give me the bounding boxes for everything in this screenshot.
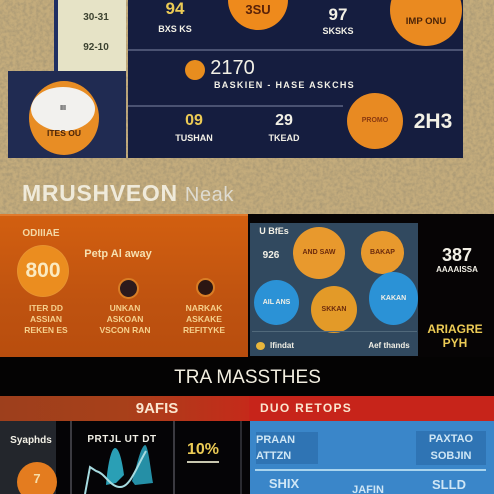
circle: blue one: AIL ANS <box>263 299 290 306</box>
legend left <box>256 341 294 350</box>
yellow callout: PYH <box>443 336 467 350</box>
white circle face: III <box>60 105 66 112</box>
stat 29 caption: TKEAD <box>268 133 300 143</box>
circle: blue two <box>369 272 418 325</box>
band: black title band <box>0 357 494 396</box>
stat 97 caption: SKSKS <box>322 26 354 36</box>
orange text column one: ASSIAN <box>30 314 62 324</box>
panel: blue-grey circles <box>250 223 418 356</box>
stat 387: 387 <box>442 245 472 265</box>
panel: black right <box>248 214 494 357</box>
orange text column three: ASKAKE <box>186 314 222 324</box>
yellow callout <box>427 322 483 350</box>
circle: right orange <box>390 0 462 46</box>
stat 29 <box>268 112 300 143</box>
circle: orange one: AND SAW <box>302 249 336 256</box>
circle: orange two: BAKAP <box>370 249 395 256</box>
icon: orange circle <box>17 462 57 494</box>
blue bottom right: SLLD <box>432 477 466 492</box>
circle: orange two <box>361 231 404 274</box>
stat 2170: 2170 <box>210 57 255 79</box>
stat 97 <box>322 5 354 36</box>
blue block top left: PRAAN <box>256 434 295 446</box>
orange text column three <box>183 303 225 335</box>
yellow callout: ARIAGRE <box>427 322 483 336</box>
circle: lower orange <box>347 93 403 149</box>
stat 29: 29 <box>275 112 293 129</box>
orange text column three: REFITYKE <box>183 325 225 335</box>
panel: black lower left <box>0 421 250 494</box>
legend left label: Ifindat <box>270 341 294 350</box>
stat 2H3: 2H3 <box>414 110 452 133</box>
circle caption: ITES OU <box>47 128 81 138</box>
icon: small orange dot <box>185 60 205 80</box>
left band label: 9AFIS <box>136 400 178 417</box>
heading: MRUSHVEON Neak <box>22 180 234 206</box>
panel: beige notes <box>54 0 126 71</box>
circle: lower orange: PROMO <box>362 117 388 124</box>
chart label: PRTJL UT DT <box>87 434 157 445</box>
circle: blue two: KAKAN <box>381 295 406 302</box>
orange text column two: UNKAN <box>110 303 140 313</box>
textured tan background <box>0 0 494 214</box>
icon: white and orange circle <box>29 81 99 155</box>
right frame line <box>240 421 242 494</box>
orange text column one: REKEN ES <box>24 325 68 335</box>
circle: blue one <box>254 280 299 325</box>
icon: dark dot one <box>118 278 139 299</box>
panel: navy statistics <box>128 0 463 158</box>
circle: 800 <box>18 246 68 296</box>
stat 09 <box>175 112 213 143</box>
circle: right orange: IMP ONU <box>406 16 446 27</box>
strip label: Syaphds <box>10 435 52 446</box>
blue block top left: ATTZN <box>256 450 291 462</box>
stat 387 caption: AAAAISSA <box>436 265 478 274</box>
stat 94 caption: BXS KS <box>158 24 192 34</box>
blue block top right: SOBJIN <box>431 450 471 462</box>
title: section heading: TRA MASSTHES <box>174 367 321 388</box>
stat 97: 97 <box>329 5 347 24</box>
circle: top orange: 3SU <box>245 2 271 17</box>
stat 09: 09 <box>185 112 203 129</box>
blue block top right <box>416 431 486 465</box>
icon: legend dot <box>256 342 265 350</box>
orange panel subheading: Petp Al away <box>84 248 152 260</box>
blue divider <box>255 469 486 471</box>
label top: U BfEs <box>259 226 289 236</box>
icon: orange circle: 7 <box>33 471 41 486</box>
circle: orange three: SKKAN <box>322 306 346 313</box>
stat 94 <box>158 0 192 34</box>
white circle face <box>31 87 95 131</box>
row divider lower <box>128 105 343 107</box>
band: red right <box>249 396 494 421</box>
row divider <box>128 49 463 51</box>
beige note values <box>83 12 109 53</box>
blue block top right: PAXTAO <box>429 433 473 445</box>
stat 09 caption: TUSHAN <box>175 133 213 143</box>
orange text column two: VSCON RAN <box>99 325 150 335</box>
icon: dark dot two <box>196 278 215 297</box>
panel: blue lower right <box>250 421 494 494</box>
orange text column two: ASKOAN <box>107 314 143 324</box>
grey strip <box>0 421 56 494</box>
blue block top left <box>256 432 318 464</box>
orange text column two <box>99 303 150 335</box>
stat 2170 caption: BASKIEN - HASE ASKCHS <box>214 80 355 90</box>
legend divider <box>252 331 417 332</box>
panel: left navy circle card <box>8 71 126 158</box>
legend right label: Aef thands <box>368 341 410 350</box>
orange text column one: ITER DD <box>29 303 63 313</box>
beige note values: 30-31 <box>83 12 109 23</box>
band: red left <box>0 396 249 421</box>
beige note values: 92-10 <box>83 42 109 53</box>
chart frame <box>70 421 175 494</box>
circle: 800: 800 <box>25 259 61 282</box>
circle: orange three <box>311 286 357 333</box>
label number: 926 <box>263 250 279 261</box>
right band label: DUO RETOPS <box>260 401 352 415</box>
circle: top orange <box>228 0 288 30</box>
orange panel label: ODIIIAE <box>22 228 60 239</box>
orange text column three: NARKAK <box>186 303 222 313</box>
orange text column one <box>24 303 68 335</box>
stat underline <box>187 461 219 463</box>
stat 10%: 10% <box>187 441 219 458</box>
panel: orange <box>0 214 248 357</box>
chart: teal waves <box>84 445 153 494</box>
circle: orange one <box>293 227 345 279</box>
blue bottom left: SHIX <box>269 476 299 491</box>
